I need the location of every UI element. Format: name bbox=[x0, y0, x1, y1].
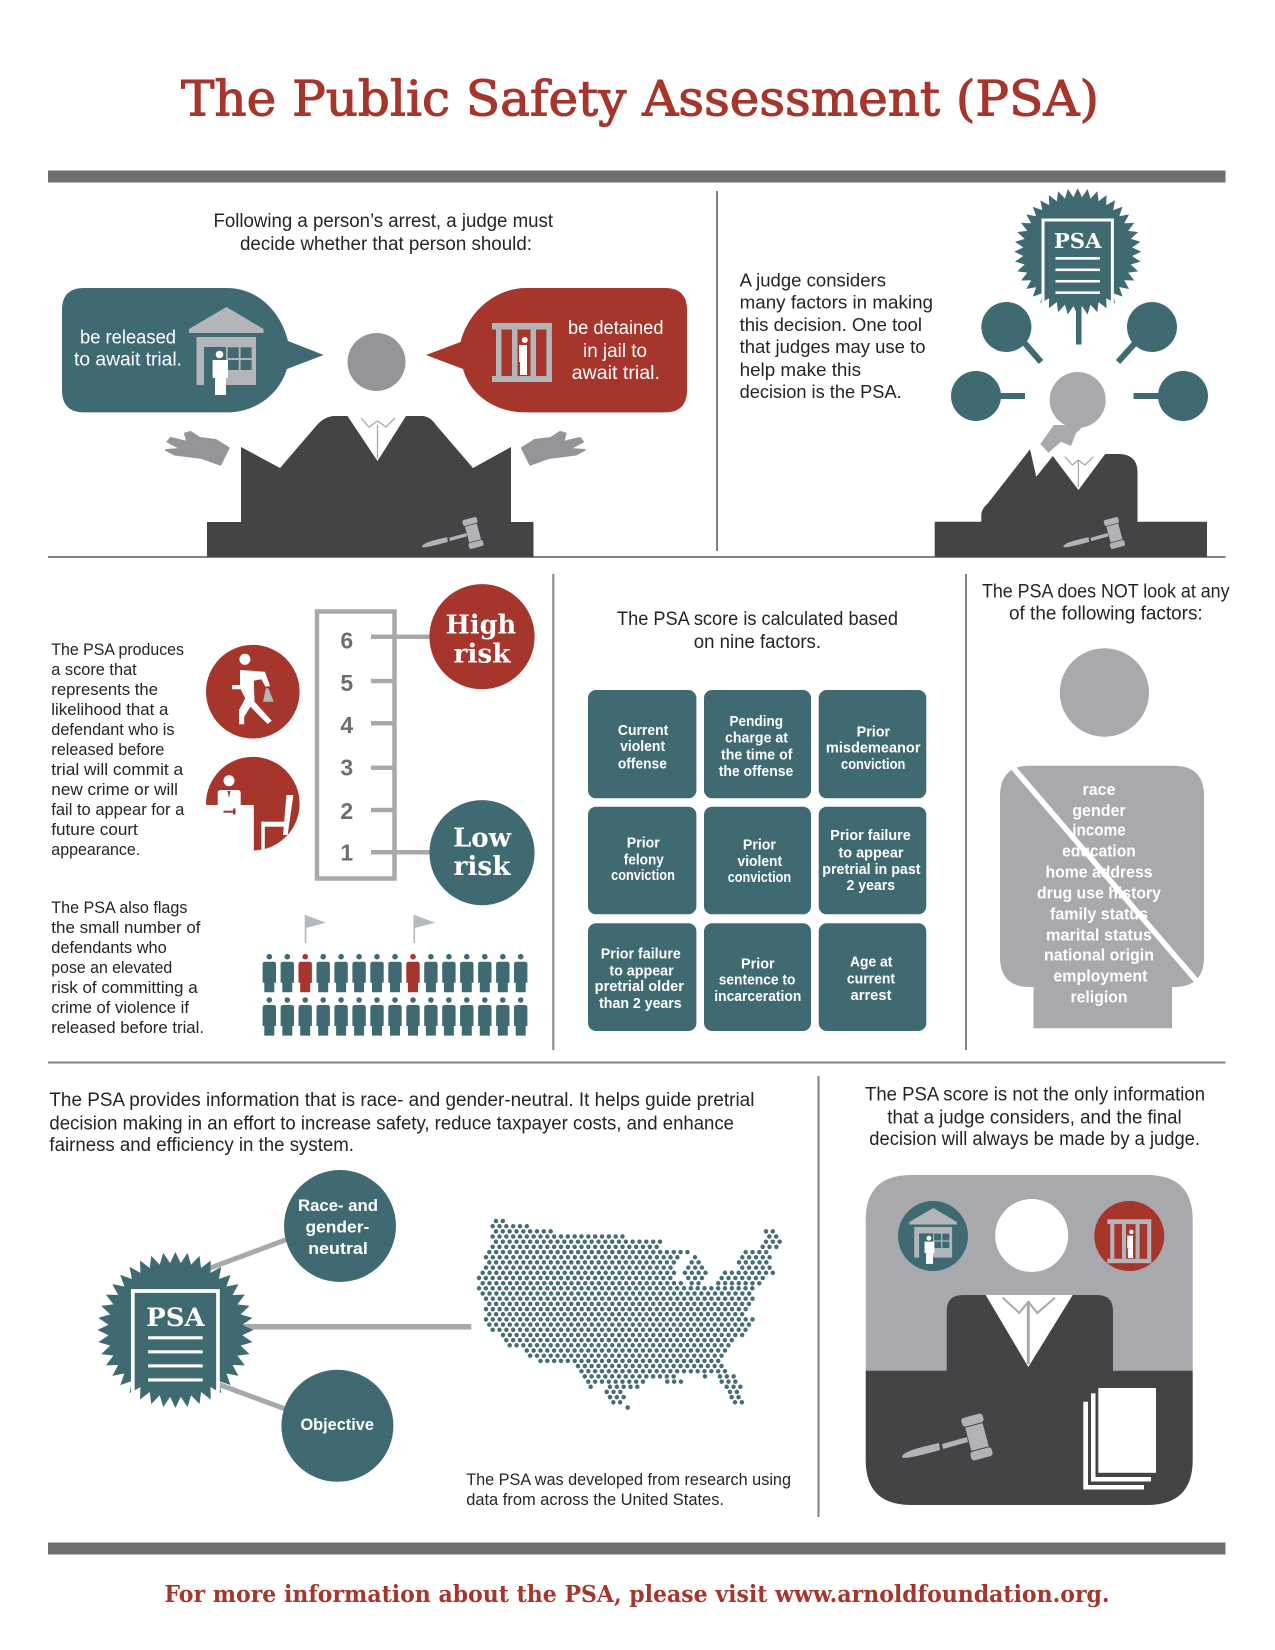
not-considered heading bbox=[982, 581, 1230, 624]
panel: final decision by judge bbox=[865, 1084, 1205, 1505]
factor tile grid: conviction bbox=[611, 868, 675, 884]
flag text: the small number of bbox=[51, 918, 201, 937]
panel: factors not considered bbox=[982, 581, 1230, 1028]
footer link text: For more information about the PSA, please visit www.arnoldfoundation.org. bbox=[164, 1581, 1110, 1608]
factor tile grid: Age at bbox=[850, 955, 893, 971]
high risk circle: High bbox=[446, 610, 516, 640]
flag text bbox=[51, 898, 204, 1037]
panel: race and gender neutral bbox=[49, 1090, 791, 1509]
factor tile grid: incarceration bbox=[714, 989, 801, 1005]
score text bbox=[51, 640, 185, 859]
score text: The PSA produces bbox=[51, 640, 184, 659]
score text: a score that bbox=[51, 660, 137, 679]
connector lines bbox=[205, 1239, 471, 1410]
factor tile grid: current bbox=[847, 971, 895, 987]
factor tile grid bbox=[588, 690, 926, 1031]
thinking judge bbox=[935, 372, 1207, 557]
low risk circle: risk bbox=[454, 852, 511, 882]
speech bubble: detained: be detained bbox=[568, 318, 664, 339]
top divider bar bbox=[48, 170, 1226, 182]
neutrality text: decision making in an effort to increase safety, reduce taxpayer costs, and enhance bbox=[49, 1113, 734, 1134]
high risk circle: risk bbox=[454, 639, 511, 669]
factor circles bbox=[951, 302, 1208, 421]
icon: stack of papers bbox=[1083, 1388, 1156, 1490]
icon: jail bbox=[1094, 1201, 1164, 1271]
score scale: 1 bbox=[340, 840, 353, 866]
circle: race- and gender-neutral: Race- and bbox=[298, 1196, 378, 1215]
factor tile grid: offense bbox=[618, 756, 667, 772]
final decision text: that a judge considers, and the final bbox=[887, 1107, 1182, 1128]
score text: new crime or will bbox=[51, 780, 178, 799]
score text: released before bbox=[51, 740, 164, 759]
score scale: 5 bbox=[340, 670, 353, 696]
score scale: 2 bbox=[340, 798, 353, 824]
factor tile grid: Current bbox=[618, 723, 668, 739]
circle: race- and gender-neutral: gender- bbox=[306, 1217, 369, 1236]
defendants pictogram bbox=[263, 954, 527, 1036]
factor tile grid: sentence to bbox=[719, 972, 796, 988]
flags bbox=[305, 915, 435, 943]
score text: represents the bbox=[51, 680, 158, 699]
PSA badge bbox=[1014, 188, 1141, 315]
map caption: The PSA was developed from research using bbox=[466, 1470, 791, 1489]
nine factors heading: The PSA score is calculated based bbox=[617, 609, 898, 630]
circle: race- and gender-neutral bbox=[284, 1170, 396, 1282]
circle: objective bbox=[281, 1370, 393, 1482]
factor tile grid: Prior failure bbox=[830, 828, 911, 844]
factor tile grid: the time of bbox=[721, 747, 793, 763]
excluded factor list: employment bbox=[1053, 968, 1148, 986]
score scale bbox=[317, 612, 431, 878]
factor tile grid: than 2 years bbox=[599, 996, 682, 1012]
excluded factor list: drug use history bbox=[1037, 884, 1162, 902]
excluded factor list: gender bbox=[1072, 802, 1126, 820]
panel: PSA as a tool bbox=[740, 188, 1208, 557]
low risk circle: Low bbox=[453, 824, 512, 854]
intro text: decide whether that person should: bbox=[240, 234, 532, 255]
map caption: data from across the United States. bbox=[466, 1490, 724, 1509]
factor tile grid: to appear bbox=[609, 963, 674, 979]
factor tile grid: conviction bbox=[728, 870, 791, 886]
speech bubble: detained: await trial. bbox=[572, 363, 660, 384]
bottom divider bar bbox=[48, 1542, 1226, 1554]
factor tile grid: 2 years bbox=[846, 878, 895, 894]
speech bubble: released: be released bbox=[80, 328, 176, 349]
large PSA badge bbox=[97, 1252, 253, 1408]
excluded factor list: race bbox=[1082, 781, 1116, 799]
explanation text: that judges may use to bbox=[740, 337, 925, 357]
excluded factor list bbox=[1037, 781, 1162, 1007]
factor tile grid: charge at bbox=[725, 730, 788, 746]
circle: race- and gender-neutral: neutral bbox=[308, 1239, 368, 1258]
score text: trial will commit a bbox=[51, 760, 184, 779]
factor tile grid: violent bbox=[738, 854, 782, 870]
person silhouette with slash bbox=[1000, 648, 1204, 1028]
factor tile grid: Pending bbox=[730, 714, 783, 730]
panel: risk score bbox=[51, 584, 535, 1037]
score text: likelihood that a bbox=[51, 700, 169, 719]
factor tile grid: pretrial in past bbox=[822, 862, 921, 878]
explanation text: help make this bbox=[740, 360, 861, 380]
panel: nine factors bbox=[588, 609, 926, 1031]
score text: future court bbox=[51, 820, 138, 839]
circle: objective: Objective bbox=[300, 1415, 374, 1434]
explanation text: this decision. One tool bbox=[740, 315, 922, 335]
high risk circle bbox=[429, 584, 535, 689]
title: The Public Safety Assessment (PSA) bbox=[181, 71, 1099, 128]
excluded factor list: income bbox=[1072, 822, 1126, 840]
icon: fleeing offender bbox=[206, 645, 300, 738]
nine factors heading bbox=[617, 609, 898, 653]
speech bubble: released: to await trial. bbox=[74, 350, 182, 370]
factor tile grid: Prior bbox=[743, 837, 776, 853]
explanation text bbox=[740, 271, 933, 402]
factor tile grid: arrest bbox=[850, 988, 892, 1004]
factor tile grid: Prior failure bbox=[601, 946, 681, 962]
large PSA badge: PSA bbox=[146, 1303, 205, 1332]
factor tile grid: misdemeanor bbox=[826, 740, 921, 756]
intro text bbox=[214, 211, 554, 255]
factor tile grid: violent bbox=[620, 739, 665, 755]
flag text: pose an elevated bbox=[51, 958, 172, 977]
score text: defendant who is bbox=[51, 720, 175, 739]
score scale: 4 bbox=[340, 712, 353, 738]
factor tile grid: Prior bbox=[857, 725, 891, 741]
low risk circle bbox=[429, 800, 535, 905]
not-considered heading: The PSA does NOT look at any bbox=[982, 581, 1230, 602]
speech bubble: detained: in jail to bbox=[583, 341, 647, 362]
final decision text: The PSA score is not the only information bbox=[865, 1084, 1205, 1105]
map caption bbox=[466, 1470, 791, 1509]
icon: release bbox=[898, 1201, 968, 1271]
PSA badge: PSA bbox=[1054, 229, 1102, 253]
excluded factor list: religion bbox=[1070, 989, 1128, 1007]
nine factors heading: on nine factors. bbox=[694, 632, 821, 653]
explanation text: many factors in making bbox=[740, 292, 933, 312]
flag text: The PSA also flags bbox=[51, 898, 187, 917]
factor tile grid: felony bbox=[624, 852, 664, 868]
judge figure bbox=[166, 333, 585, 557]
flag text: risk of committing a bbox=[51, 978, 198, 997]
factor tile grid: pretrial older bbox=[595, 979, 684, 995]
judge illustration panel bbox=[866, 1175, 1193, 1505]
flag text: defendants who bbox=[51, 938, 167, 957]
score scale: 3 bbox=[340, 755, 353, 781]
excluded factor list: home address bbox=[1046, 864, 1152, 882]
explanation text: decision is the PSA. bbox=[740, 382, 902, 402]
speech bubble: detained bbox=[426, 288, 687, 412]
explanation text: A judge considers bbox=[740, 271, 886, 291]
factor tile grid: conviction bbox=[841, 757, 905, 773]
excluded factor list: national origin bbox=[1044, 947, 1154, 965]
intro text: Following a person’s arrest, a judge must bbox=[214, 211, 554, 232]
flag text: released before trial. bbox=[51, 1018, 204, 1037]
excluded factor list: education bbox=[1062, 843, 1136, 861]
not-considered heading: of the following factors: bbox=[1009, 603, 1203, 624]
icon: empty court chair bbox=[205, 757, 300, 852]
neutrality text: The PSA provides information that is race- and gender-neutral. It helps guide pretrial bbox=[49, 1090, 754, 1111]
score scale: 6 bbox=[340, 627, 353, 653]
factor tile grid: Prior bbox=[741, 956, 775, 972]
panel: judge must decide bbox=[62, 211, 687, 557]
score text: fail to appear for a bbox=[51, 800, 185, 819]
score text: appearance. bbox=[51, 840, 140, 859]
factor tile grid: to appear bbox=[838, 845, 904, 861]
neutrality text bbox=[49, 1090, 754, 1156]
excluded factor list: family status bbox=[1050, 905, 1148, 923]
factor tile grid: Prior bbox=[627, 835, 660, 851]
neutrality text: fairness and efficiency in the system. bbox=[49, 1135, 354, 1156]
final decision text bbox=[865, 1084, 1205, 1150]
dot map of the United States bbox=[479, 1221, 780, 1408]
flag text: crime of violence if bbox=[51, 998, 189, 1017]
speech bubble: released bbox=[62, 288, 324, 412]
final decision text: decision will always be made by a judge. bbox=[869, 1129, 1200, 1150]
icon: gavel bbox=[902, 1413, 993, 1461]
excluded factor list: marital status bbox=[1046, 927, 1152, 945]
factor tile grid: the offense bbox=[719, 764, 793, 780]
